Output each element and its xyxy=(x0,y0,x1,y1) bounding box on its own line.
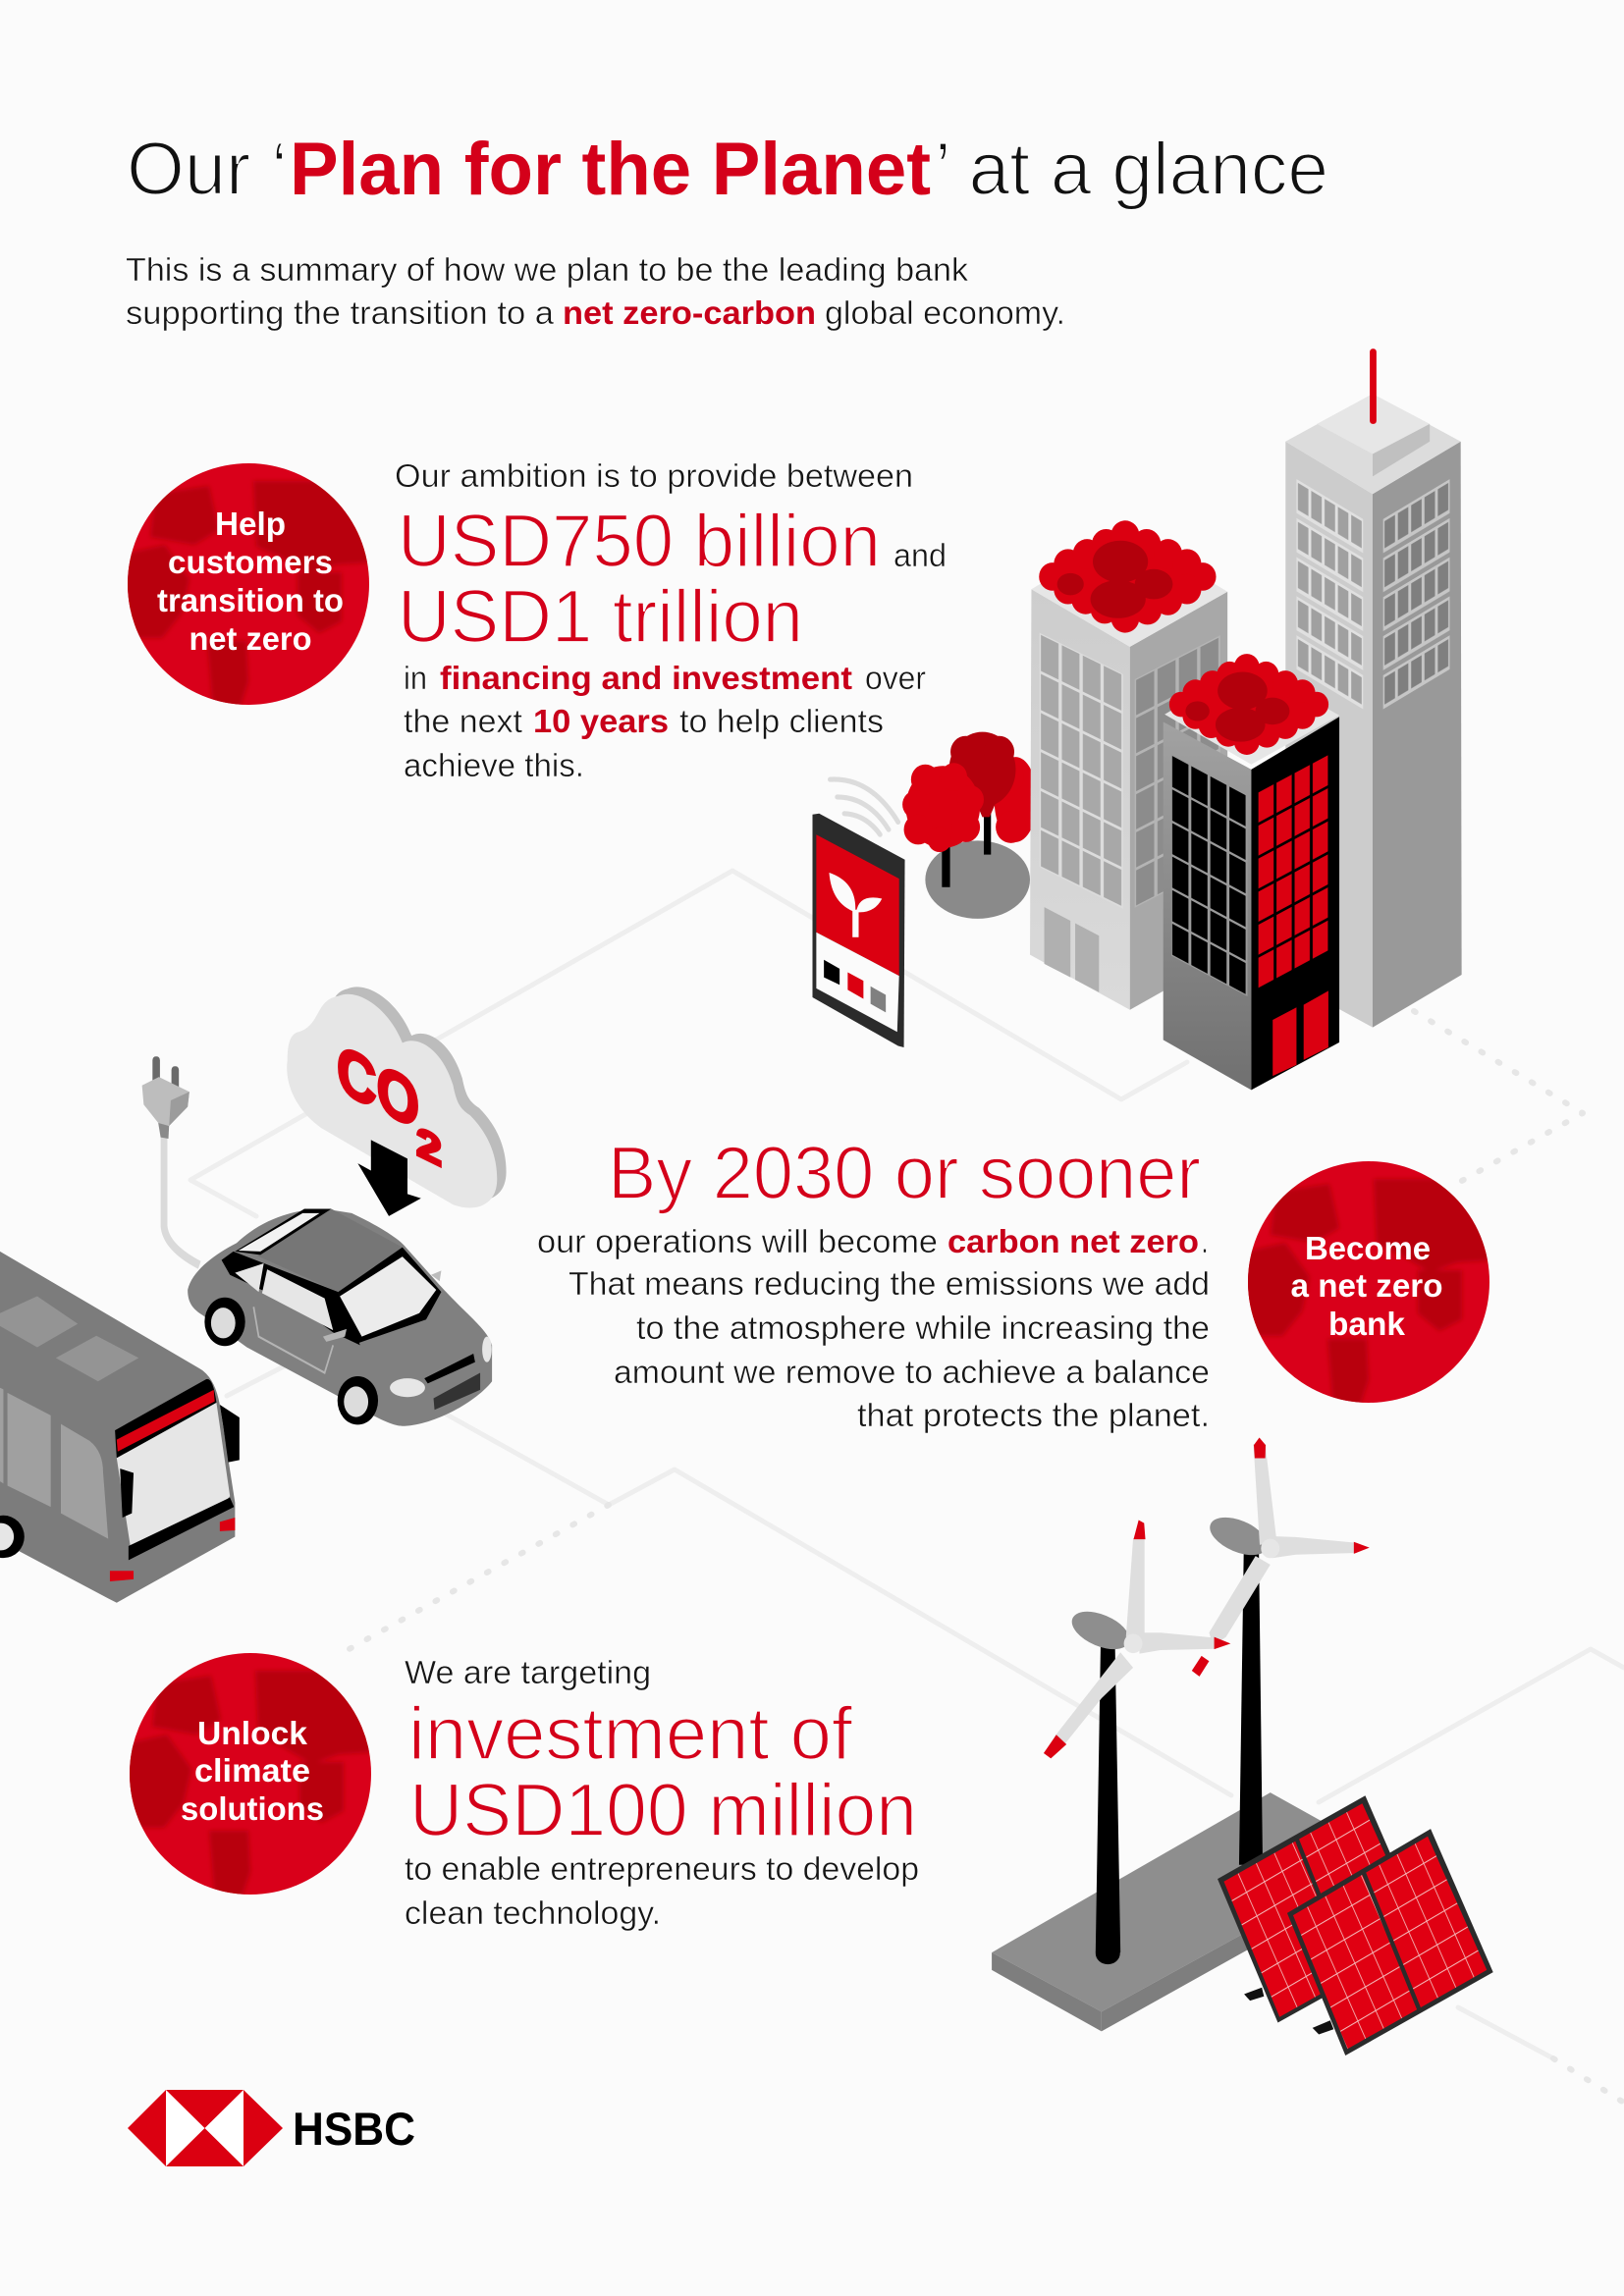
text block: financing ambition: USD750 billion xyxy=(398,500,881,583)
badge: help customers transition to net zero: Help xyxy=(215,506,286,542)
CO2 label on cloud: 2 xyxy=(416,1118,442,1176)
text block: financing ambition: in xyxy=(404,660,427,696)
badge: become a net zero bank: bank xyxy=(1328,1306,1406,1342)
title: Plan for the Planet xyxy=(290,128,931,211)
text block: financing ambition: achieve this. xyxy=(404,747,584,783)
illustration: CO2 cloud, plug, car and bus xyxy=(0,987,507,1603)
HSBC logo xyxy=(128,2090,415,2166)
bus xyxy=(0,1252,240,1603)
CO2 cloud xyxy=(287,987,507,1207)
base platform xyxy=(992,1792,1384,2031)
text block: investment target: We are targeting xyxy=(405,1654,651,1690)
badge: help customers transition to net zero: net zero xyxy=(189,620,312,657)
badge: help customers transition to net zero: customers xyxy=(168,544,333,580)
illustration: wind turbines and solar panels xyxy=(992,1438,1493,2056)
HSBC logo: HSBC xyxy=(293,2103,415,2155)
tall tower xyxy=(1285,348,1462,1028)
background network lines xyxy=(190,871,1624,2103)
text block: financing ambition: the next xyxy=(404,703,522,739)
CO2 label on cloud: CO xyxy=(337,1030,419,1145)
text block: financing ambition: to help clients xyxy=(679,703,884,739)
text block: financing ambition: over xyxy=(865,660,926,696)
text block: investment target: investment of xyxy=(408,1692,853,1776)
plug and cable xyxy=(142,1056,199,1265)
text block: investment target xyxy=(405,1654,919,1931)
text block: financing ambition xyxy=(395,457,947,783)
text block: by 2030 or sooner: amount we remove to achieve a balance xyxy=(614,1354,1210,1390)
text block: investment target: clean technology. xyxy=(405,1895,661,1931)
illustration: city buildings, trees and phone xyxy=(813,348,1462,1090)
text block: by 2030 or sooner: that protects the planet. xyxy=(857,1397,1210,1433)
text block: by 2030 or sooner xyxy=(537,1132,1210,1433)
arrow down to car xyxy=(357,1140,421,1216)
text block: investment target: USD100 million xyxy=(409,1769,917,1852)
title: ’ at a glance xyxy=(935,128,1328,211)
text block: financing ambition: financing and investment xyxy=(440,660,852,696)
badge: become a net zero bank xyxy=(1241,1161,1491,1410)
intro paragraph xyxy=(126,251,1065,331)
text block: by 2030 or sooner: carbon net zero xyxy=(947,1223,1199,1259)
badge: help customers transition to net zero: transition to xyxy=(157,582,344,618)
black and red building xyxy=(1164,654,1339,1090)
text block: by 2030 or sooner: That means reducing the emissions we add xyxy=(568,1265,1210,1302)
badge: become a net zero bank: Become xyxy=(1305,1230,1431,1266)
badge: unlock climate solutions: climate xyxy=(194,1752,310,1789)
badge: unlock climate solutions: Unlock xyxy=(197,1715,308,1751)
badge: help customers transition to net zero xyxy=(121,463,371,712)
text block: by 2030 or sooner: our operations will become xyxy=(537,1223,938,1259)
turbine right xyxy=(1192,1438,1370,1865)
trees on round plot xyxy=(902,732,1037,919)
title: Our ‘ xyxy=(127,128,288,211)
title xyxy=(127,128,1328,211)
badge: become a net zero bank: a net zero xyxy=(1290,1267,1443,1304)
phone with sprout xyxy=(813,779,905,1047)
car xyxy=(188,1209,492,1426)
text block: financing ambition: Our ambition is to provide between xyxy=(395,457,913,494)
badge: unlock climate solutions: solutions xyxy=(181,1790,324,1827)
intro paragraph: supporting the transition to a xyxy=(126,294,555,331)
middle building with green roof xyxy=(1030,520,1227,1010)
logo hexagon xyxy=(128,2090,283,2166)
intro paragraph: net zero-carbon xyxy=(563,294,816,331)
text block: investment target: to enable entrepreneurs to develop xyxy=(405,1850,919,1887)
text block: financing ambition: USD1 trillion xyxy=(398,575,803,659)
text block: financing ambition: and xyxy=(893,537,947,573)
solar panels xyxy=(1218,1795,1493,2056)
turbine left xyxy=(1044,1520,1230,1964)
intro paragraph: global economy. xyxy=(825,294,1065,331)
intro paragraph: This is a summary of how we plan to be the leading bank xyxy=(126,251,969,288)
badge: unlock climate solutions xyxy=(123,1653,373,1901)
text block: by 2030 or sooner: . xyxy=(1201,1223,1209,1259)
text block: by 2030 or sooner: By 2030 or sooner xyxy=(608,1132,1201,1215)
text block: financing ambition: 10 years xyxy=(533,703,669,739)
text block: by 2030 or sooner: to the atmosphere while increasing the xyxy=(636,1309,1210,1346)
